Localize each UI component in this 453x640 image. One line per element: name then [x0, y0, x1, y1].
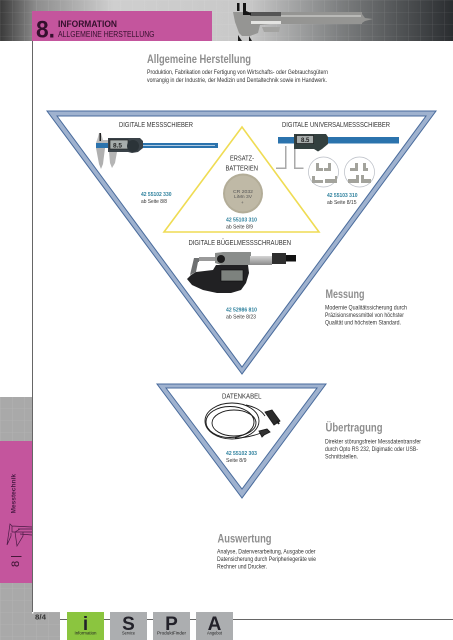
label: Digitale Bügelmessschrauben: DIGITALE BÜGELMESSSCHRAUBEN — [188, 239, 291, 247]
part number: data cable: Seite 8/9 — [226, 458, 247, 464]
footer rule — [60, 619, 453, 620]
text block: Übertragung: Direkter störungsfreier Messdatentransfer — [325, 440, 421, 446]
header band — [0, 0, 453, 41]
text block: Auswertung: Datensicherung durch Peripheriegeräte wie — [217, 557, 317, 563]
sidebar chapter number: 8 | — [10, 555, 22, 567]
label: Digitale Universalmessschieber: DIGITALE UNIVERSALMESSSCHIEBER — [282, 122, 390, 129]
page number box: 8/4 — [35, 614, 46, 622]
icon: battery: LiMn 3V — [234, 194, 252, 199]
icon: universal caliper — [276, 134, 399, 169]
chapter title: INFORMATION — [58, 19, 117, 29]
part number: universal caliper — [327, 193, 358, 206]
intro text — [147, 70, 328, 84]
button: Angebot: A — [208, 614, 222, 635]
text block: Auswertung: Analyse, Datenverarbeitung, Ausgabe oder — [217, 550, 316, 556]
button: Information: Information — [74, 630, 97, 636]
icon: battery — [223, 174, 263, 214]
sidebar — [0, 397, 32, 640]
text block: Übertragung: durch Opto RS 232, Digimatic oder USB- — [325, 447, 418, 453]
part number: battery: 42 55103 310 — [226, 218, 257, 224]
yellow triangle — [164, 127, 319, 232]
chapter number: 8. — [36, 16, 55, 44]
button: ProduktFinder — [153, 612, 190, 640]
text block: Messung: Messung — [326, 289, 364, 301]
header tab — [32, 11, 212, 44]
icon: battery: + — [241, 200, 244, 205]
chapter subtitle: ALLGEMEINE HERSTELLUNG — [58, 29, 154, 39]
icon: header caliper — [233, 3, 373, 41]
icon: caliper accessories — [308, 157, 374, 187]
text block: Auswertung: Auswertung — [218, 534, 272, 546]
icon: digital caliper: 8.5 — [113, 142, 122, 150]
icon: universal caliper: 8.5 — [301, 138, 310, 144]
text block: Übertragung: Übertragung — [326, 422, 382, 434]
large triangle frame — [47, 111, 436, 374]
text block: Messung: Qualität und höchstem Standard. — [325, 320, 401, 326]
button: ProduktFinder: ProduktFinder — [157, 630, 187, 636]
icon: micrometer — [187, 252, 296, 293]
part number: calipers — [141, 192, 172, 205]
part number: calipers: ab Seite 8/8 — [141, 199, 167, 205]
icon: battery: CR 2032 — [233, 189, 254, 194]
button: Information — [67, 612, 104, 640]
part number: data cable — [226, 451, 257, 464]
label: Datenkabel: DATENKABEL — [222, 394, 262, 400]
text block: Messung — [325, 289, 407, 326]
text block: Messung: Präzisionsmessmittel von höchster — [325, 313, 404, 319]
sidebar label: Messtechnik — [10, 474, 18, 514]
part number: micrometer: 42 52986 810 — [226, 308, 257, 314]
part number: data cable: 42 55102 303 — [226, 451, 257, 457]
small triangle frame — [157, 384, 326, 498]
label: Ersatzbatterien — [226, 154, 258, 172]
button: Service — [110, 612, 147, 640]
button: Service: Service — [122, 630, 135, 636]
icon: sidebar caliper — [7, 524, 32, 546]
button: Information: i — [83, 614, 88, 635]
page number box — [0, 612, 60, 640]
part number: universal caliper: ab Seite 8/15 — [327, 200, 357, 206]
part number: universal caliper: 42 55103 310 — [327, 193, 358, 199]
part number: micrometer — [226, 308, 257, 320]
text block: Übertragung: Schnittstellen. — [325, 454, 358, 460]
intro text: Produktion, Fabrikation oder Fertigung von Wirtschafts- oder Gebrauchsgütern — [147, 70, 328, 76]
button: ProduktFinder: P — [165, 614, 178, 635]
label: Ersatzbatterien: ERSATZ- — [230, 154, 254, 162]
part number: battery: ab Seite 8/9 — [226, 224, 253, 230]
part number: battery — [226, 218, 257, 230]
part number: micrometer: ab Seite 8/23 — [226, 314, 256, 320]
text block: Messung: Modernie Qualitätssicherung durch — [325, 306, 407, 312]
button: Angebot: Angebot — [207, 630, 223, 636]
part number: calipers: 42 55102 330 — [141, 192, 172, 198]
icon: data cable — [205, 403, 280, 439]
label: Digitale Messschieber: DIGITALE MESSSCHIEBER — [119, 122, 193, 129]
intro text: vorrangig in der Industrie, der Medizin und Dentaltechnik sowie im Handwerk. — [147, 78, 327, 84]
text block: Auswertung — [217, 534, 317, 570]
vertical rule — [32, 41, 33, 613]
heading: Allgemeine Herstellung: Allgemeine Herstellung — [147, 54, 251, 66]
text block: Übertragung — [325, 422, 421, 460]
label: Ersatzbatterien: BATTERIEN — [226, 164, 258, 172]
text block: Auswertung: Rechner und Drucker. — [217, 564, 267, 570]
button: Angebot — [196, 612, 233, 640]
button: Service: S — [122, 614, 135, 635]
icon: digital caliper — [96, 133, 218, 169]
